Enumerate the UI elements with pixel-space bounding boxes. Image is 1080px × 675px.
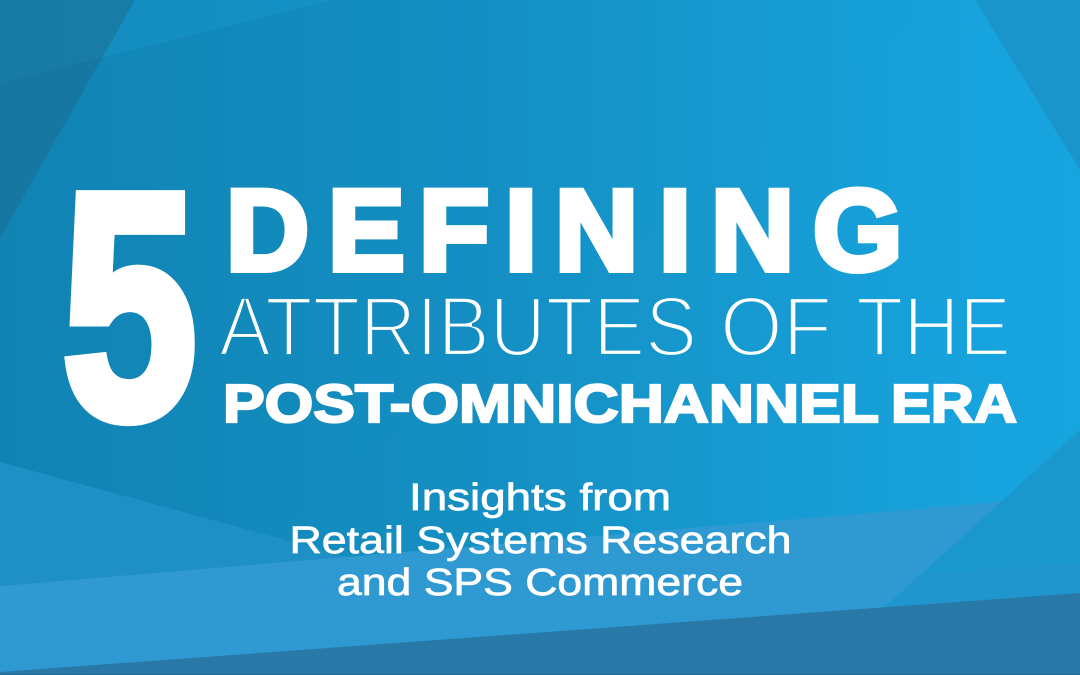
heading: ATTRIBUTES OF THE	[219, 280, 1011, 374]
heading: POST-OMNICHANNEL ERA: ERA	[891, 374, 1017, 434]
subtitle: and SPS Commerce	[337, 562, 743, 604]
subtitle	[290, 477, 792, 604]
heading: ATTRIBUTES OF THE: ATTRIBUTES	[219, 280, 697, 374]
numeral 5: 5	[62, 127, 197, 486]
subtitle: Retail Systems Research	[290, 520, 792, 562]
heading: POST-OMNICHANNEL ERA: POST-OMNICHANNEL	[223, 374, 879, 434]
heading: ATTRIBUTES OF THE: THE	[856, 280, 1011, 374]
subtitle: Insights from	[409, 477, 671, 519]
heading: ATTRIBUTES OF THE: OF	[720, 280, 832, 374]
heading: DEFINING: DEFINING	[226, 167, 902, 295]
